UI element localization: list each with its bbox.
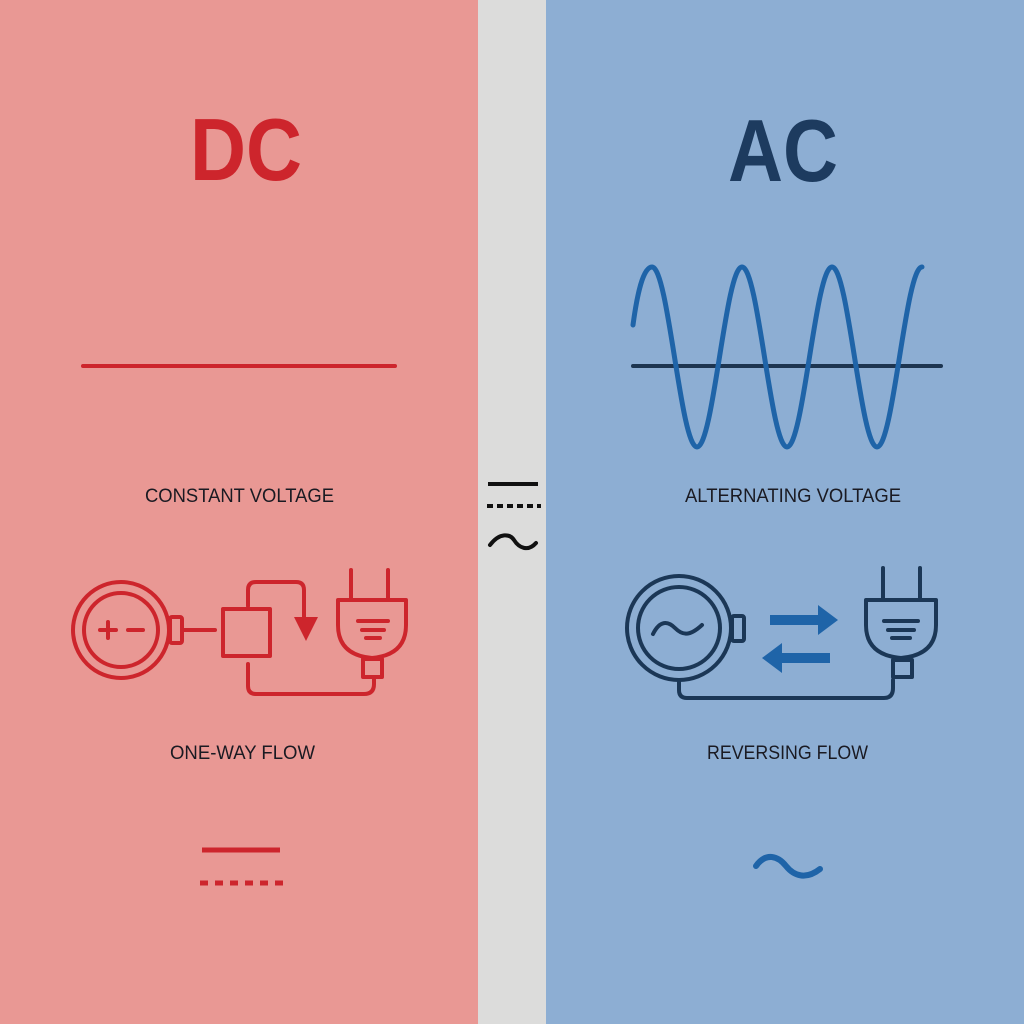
arrows: reversing bbox=[762, 605, 838, 673]
DC constant line bbox=[83, 364, 395, 368]
panel: AC bbox=[546, 0, 1024, 1024]
icon: AC circuit bbox=[627, 568, 936, 698]
AC label: alternating voltage: ALTERNATING VOLTAGE bbox=[685, 486, 901, 507]
DC label: one-way flow: ONE-WAY FLOW bbox=[170, 743, 315, 764]
AC sine wave chart bbox=[633, 267, 941, 447]
AC label: reversing flow: REVERSING FLOW bbox=[707, 743, 868, 764]
DC symbol bbox=[200, 850, 284, 883]
AC title: AC bbox=[728, 101, 838, 200]
DC label: constant voltage: CONSTANT VOLTAGE bbox=[145, 486, 334, 507]
AC symbol bbox=[756, 857, 820, 876]
icon: DC circuit bbox=[73, 570, 406, 694]
panel: DC bbox=[0, 0, 478, 1024]
panel: middle symbols bbox=[478, 0, 546, 1024]
DC title: DC bbox=[190, 100, 302, 199]
